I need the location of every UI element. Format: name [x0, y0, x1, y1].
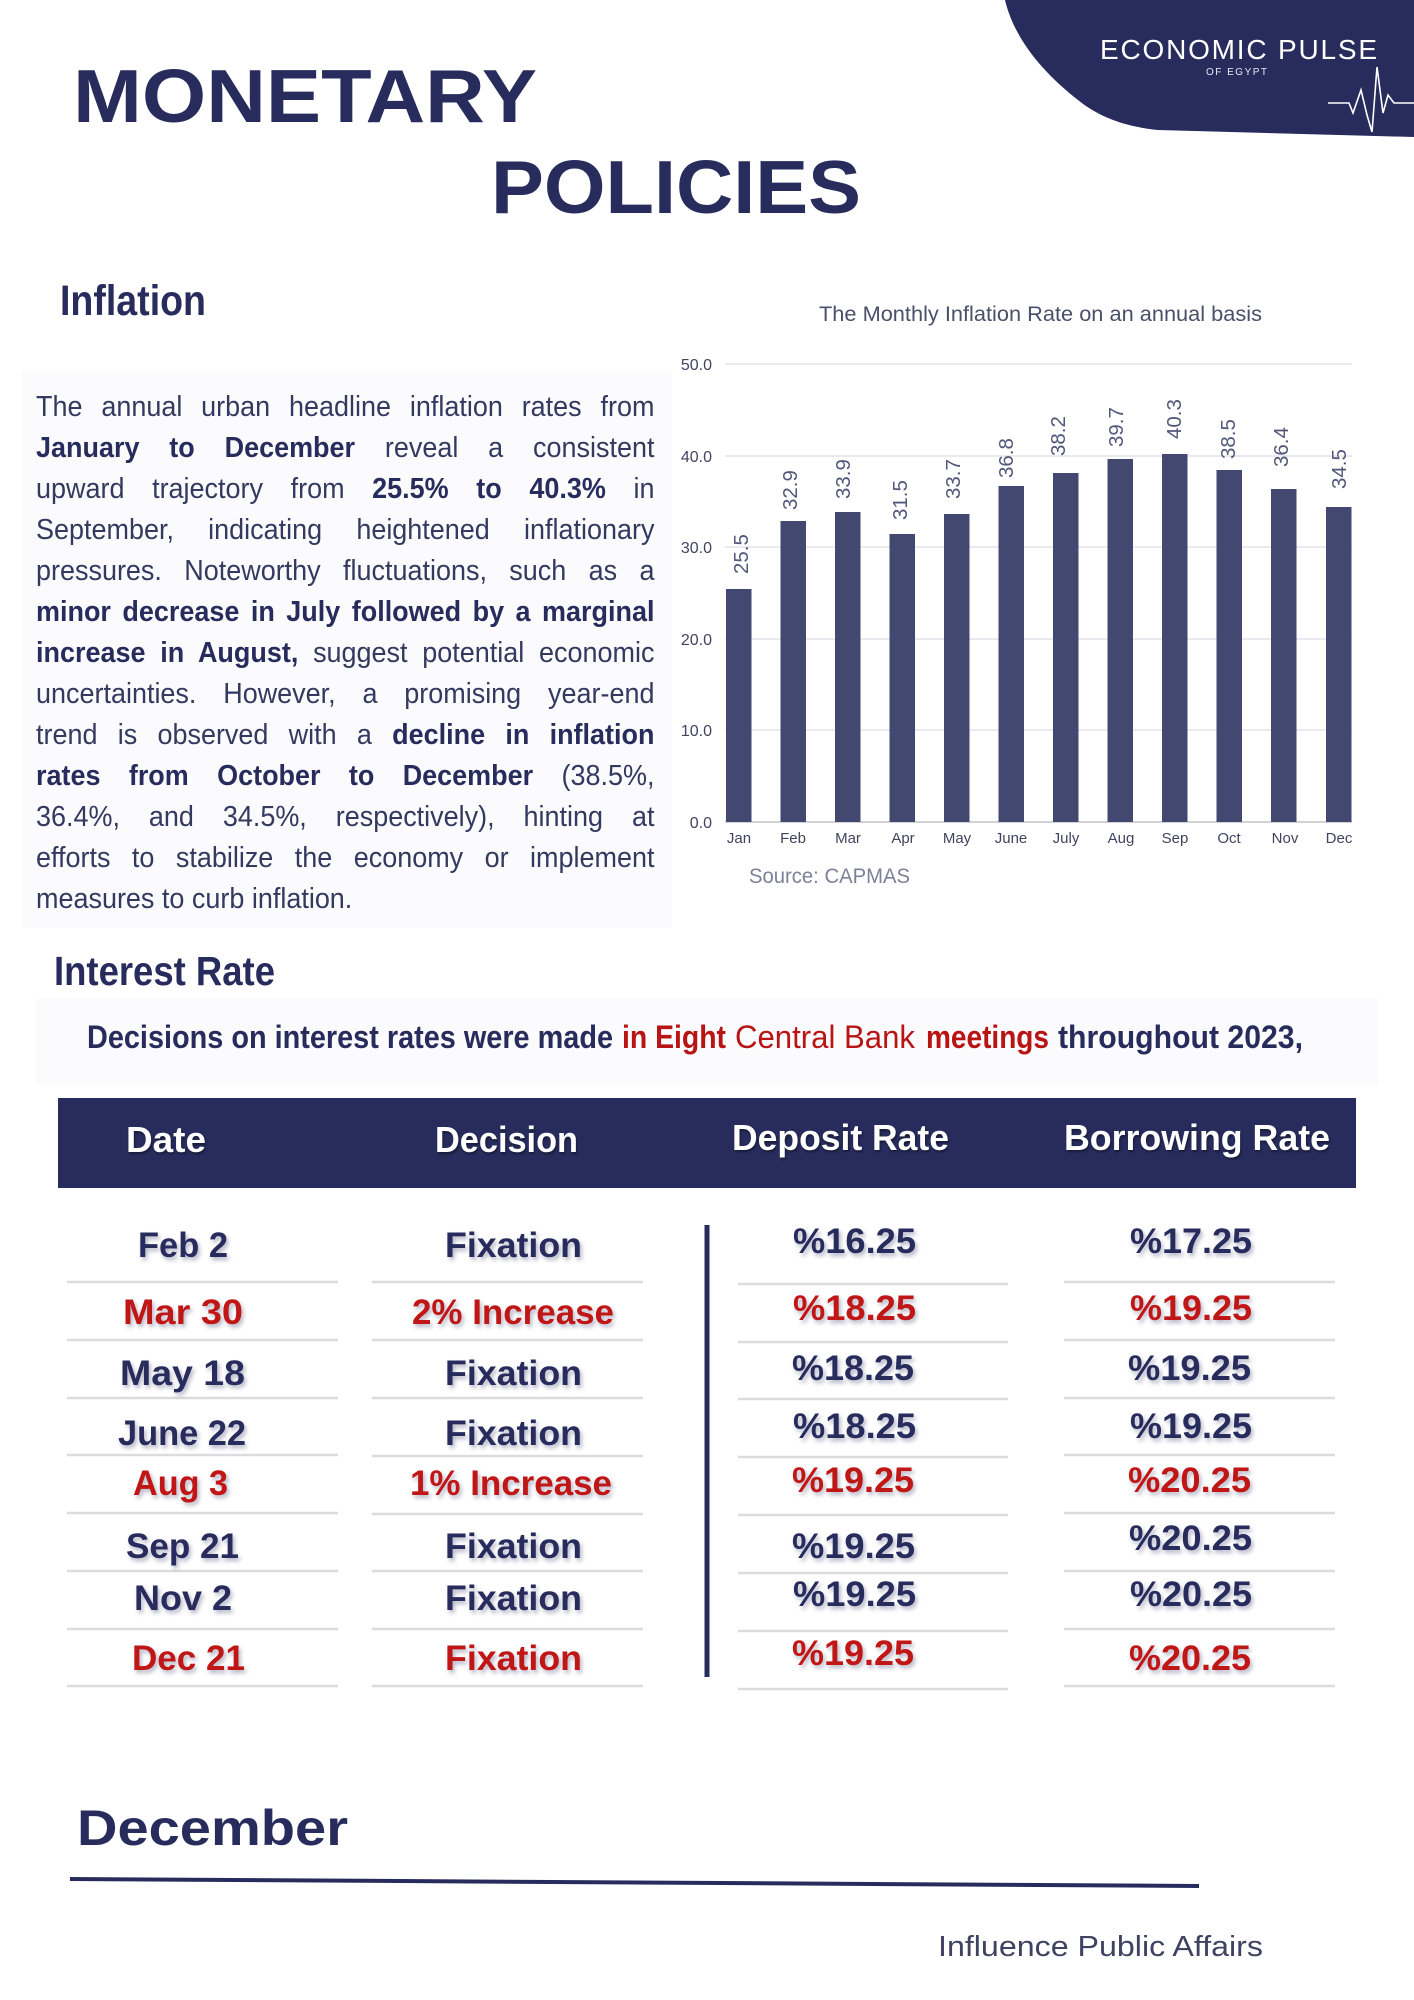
value labels: 32.9	[779, 470, 802, 510]
callout: decisions statement: Central Bank	[735, 1019, 916, 1055]
value labels: 33.7	[942, 459, 965, 499]
paragraph panel: inflation summary: increase in August, suggest potential economic	[36, 637, 654, 669]
row: Mar 30: %19.25	[1130, 1289, 1252, 1328]
paragraph panel: inflation summary: uncertainties. However, a promising year-end	[36, 678, 654, 710]
x axis labels: July	[1053, 830, 1080, 847]
value labels: 36.4	[1270, 427, 1293, 467]
x axis labels: Jan	[727, 830, 751, 847]
row: Aug 3: %20.25	[1128, 1461, 1251, 1500]
heading: Inflation: Inflation	[60, 277, 206, 325]
paragraph panel: inflation summary: measures to curb inflation.	[36, 883, 352, 915]
value labels: 34.5	[1328, 449, 1351, 489]
y axis labels: 20.0	[681, 632, 712, 649]
bar chart: monthly inflation rate	[681, 303, 1353, 888]
row: Nov 2: Fixation	[445, 1579, 582, 1618]
header: Economic Pulse logo corner: ECONOMIC PULSE	[1100, 34, 1377, 65]
paragraph panel: inflation summary: The annual urban headline inflation rates from	[36, 391, 654, 423]
table header: Decision	[435, 1119, 578, 1160]
row: Mar 30	[123, 1289, 1252, 1332]
row: Dec 21	[132, 1634, 1251, 1678]
row: Nov 2: Nov 2	[134, 1579, 232, 1618]
row: Mar 30: Mar 30	[123, 1293, 243, 1332]
callout: decisions statement: meetings	[926, 1019, 1049, 1055]
heading: Interest Rate: Interest Rate	[54, 948, 275, 994]
value labels: 25.5	[730, 534, 753, 574]
x axis labels: Dec	[1326, 830, 1353, 847]
row: Sep 21	[126, 1519, 1252, 1566]
x axis labels: Nov	[1272, 830, 1299, 847]
row: Feb 2: %17.25	[1130, 1222, 1252, 1261]
row: May 18: Fixation	[445, 1354, 582, 1393]
x axis labels: June	[995, 830, 1027, 847]
paragraph panel: inflation summary: upward trajectory from 25.5% to 40.3% in	[36, 473, 654, 505]
row: Sep 21: %19.25	[792, 1527, 915, 1566]
row: Aug 3: Aug 3	[133, 1464, 228, 1503]
y axis labels: 10.0	[681, 723, 712, 740]
row: June 22: %19.25	[1130, 1407, 1252, 1446]
row: Feb 2: Feb 2	[138, 1226, 228, 1265]
value labels: 39.7	[1105, 407, 1128, 447]
row: Sep 21: Sep 21	[126, 1527, 239, 1566]
value labels: 40.3	[1163, 399, 1186, 439]
row: June 22: June 22	[118, 1414, 246, 1453]
paragraph panel: inflation summary: minor decrease in July followed by a marginal	[36, 596, 654, 628]
source note: Source: CAPMAS	[749, 865, 910, 888]
paragraph panel: inflation summary: trend is observed with a decline in inflation	[36, 719, 654, 751]
row: Dec 21: %20.25	[1129, 1639, 1251, 1678]
callout: decisions statement: throughout 2023,	[1058, 1019, 1303, 1055]
row: June 22: %18.25	[793, 1407, 916, 1446]
title	[73, 54, 861, 229]
row: Mar 30: %18.25	[793, 1289, 916, 1328]
paragraph panel: inflation summary: January to December reveal a consistent	[36, 432, 654, 464]
paragraph panel: inflation summary: rates from October to December (38.5%,	[36, 760, 654, 792]
x axis labels: Mar	[835, 830, 861, 847]
row: June 22	[118, 1407, 1252, 1453]
table header	[58, 1098, 1356, 1188]
row: Sep 21: Fixation	[445, 1527, 582, 1566]
row: May 18: May 18	[120, 1354, 245, 1393]
y axis labels: 50.0	[681, 357, 712, 374]
row: Nov 2	[134, 1575, 1252, 1618]
paragraph panel: inflation summary: efforts to stabilize the economy or implement	[36, 842, 654, 874]
table: interest rate decisions	[58, 1098, 1356, 1689]
y axis labels: 0.0	[690, 815, 712, 832]
row: Feb 2: %16.25	[793, 1222, 916, 1261]
row: May 18: %19.25	[1128, 1349, 1251, 1388]
paragraph panel: inflation summary: pressures. Noteworthy fluctuations, such as a	[36, 555, 654, 587]
row: Mar 30: 2% Increase	[412, 1293, 614, 1332]
callout: decisions statement: Decisions on interest rates were made	[87, 1019, 613, 1055]
value labels: 33.9	[832, 459, 855, 499]
value labels: 38.2	[1047, 416, 1070, 456]
x axis labels: Apr	[891, 830, 915, 847]
title: POLICIES	[491, 145, 861, 229]
row: Dec 21: Fixation	[445, 1639, 582, 1678]
x axis labels: Aug	[1108, 830, 1134, 847]
y axis labels: 30.0	[681, 540, 712, 557]
row: Feb 2: Fixation	[445, 1226, 582, 1265]
value labels	[730, 399, 1351, 574]
header: Economic Pulse logo corner: OF EGYPT	[1206, 67, 1267, 78]
value labels: 36.8	[995, 438, 1018, 478]
x axis labels: Feb	[780, 830, 806, 847]
value labels: 31.5	[889, 480, 912, 520]
row: Aug 3: 1% Increase	[410, 1464, 612, 1503]
y axis labels: 40.0	[681, 449, 712, 466]
paragraph panel: inflation summary	[22, 371, 672, 928]
title: MONETARY	[73, 54, 537, 138]
paragraph panel: inflation summary: 36.4%, and 34.5%, respectively), hinting at	[36, 801, 654, 833]
bars	[726, 454, 1352, 822]
callout: decisions statement	[36, 998, 1378, 1085]
row: Dec 21: %19.25	[792, 1634, 914, 1673]
footer heading: December: December	[77, 1800, 348, 1856]
chart title: The Monthly Inflation Rate on an annual basis	[819, 303, 1262, 326]
x axis labels: May	[943, 830, 972, 847]
footer credit: Influence Public Affairs	[938, 1931, 1263, 1963]
row: Dec 21: Dec 21	[132, 1639, 245, 1678]
callout: decisions statement: in Eight	[622, 1019, 726, 1055]
x axis labels	[727, 830, 1353, 847]
row: Aug 3: %19.25	[792, 1461, 914, 1500]
row: May 18: %18.25	[792, 1349, 914, 1388]
x axis labels: Oct	[1217, 830, 1241, 847]
row: May 18	[120, 1349, 1251, 1393]
value labels: 38.5	[1217, 419, 1240, 459]
row: June 22: Fixation	[445, 1414, 582, 1453]
row: Nov 2: %20.25	[1130, 1575, 1252, 1614]
row: Nov 2: %19.25	[793, 1575, 916, 1614]
header: Economic Pulse logo corner	[1005, 0, 1414, 137]
y axis labels	[681, 357, 712, 832]
row: Feb 2	[138, 1222, 1252, 1265]
table header: Deposit Rate	[732, 1117, 949, 1158]
table header: Date	[126, 1119, 206, 1160]
paragraph panel: inflation summary: September, indicating heightened inflationary	[36, 514, 654, 546]
table header: Borrowing Rate	[1064, 1117, 1330, 1158]
x axis labels: Sep	[1162, 830, 1188, 847]
row: Aug 3	[133, 1461, 1251, 1503]
row: Sep 21: %20.25	[1129, 1519, 1252, 1558]
